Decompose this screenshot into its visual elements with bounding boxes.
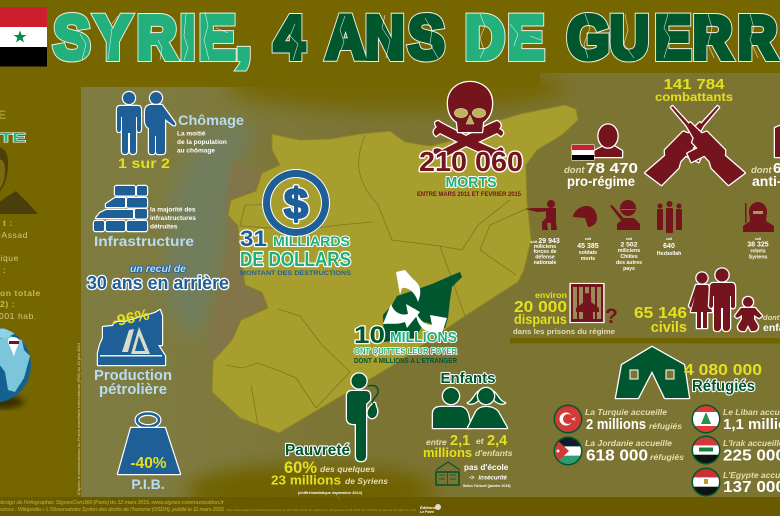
section: morts: MORTS: [446, 174, 496, 191]
icon: children: [433, 388, 507, 428]
section: pauvreté: [271, 374, 388, 495]
title word: DE: DE: [465, 4, 544, 72]
text: Turquie: réfugiés: [649, 422, 683, 431]
sidebar facts: :: [3, 265, 6, 275]
section: pauvreté: 23 millions: [271, 472, 341, 488]
icon: man with bag: [347, 374, 377, 461]
section: destructions: DE DOLLARS: [240, 249, 351, 271]
flag of Syria: [0, 7, 47, 66]
icon: dollar coin: [262, 169, 330, 237]
section: combattants: [645, 76, 745, 195]
section: combattants: combattants: [655, 90, 733, 104]
pro-régime group: 78 470: [586, 160, 638, 177]
section: recul: un recul de: [130, 263, 186, 275]
label: Production: [94, 367, 172, 384]
label: rebelles: Syriens: [749, 254, 767, 260]
text: Irak: 225 000: [723, 448, 780, 464]
label: chiites: [616, 237, 642, 272]
icon: soldier: [594, 124, 622, 157]
label: rebelles: [747, 237, 769, 260]
section: réfugiés: Réfugiés: [692, 378, 755, 395]
section: déplacés: MILLIONS: [390, 329, 457, 346]
icon: rebel (cropped): [775, 125, 780, 157]
sidebar facts: on totale: [0, 288, 41, 298]
label: hezbollah: [657, 237, 681, 257]
sidebar facts: 001 hab.: [0, 311, 37, 321]
panel: main content background: [81, 66, 780, 516]
label: chiites: soit: [626, 237, 633, 241]
icon: globe pin: [8, 337, 19, 357]
text: Irak: [723, 438, 780, 464]
icon: weight: [118, 414, 180, 474]
title word: SYRIE,: SYRIE,: [53, 4, 251, 72]
icon: masked rebel: [743, 202, 774, 232]
globe: [0, 327, 31, 409]
icon: two men: [117, 92, 175, 154]
flag: Jordanie: [554, 436, 582, 466]
caption: ENTRE MARS 2011 ET FEVRIER 2015: [417, 191, 521, 198]
description: [150, 206, 196, 230]
flag: Turquie: [554, 404, 582, 434]
text: Turquie: 2 millions: [586, 416, 646, 433]
label: chiites: miliciens: [618, 248, 640, 254]
figure: et: [476, 436, 485, 446]
figure: [423, 433, 513, 460]
label: rebelles: soit: [755, 237, 762, 241]
flag: Liban: [692, 404, 720, 434]
figure: 2,1: [450, 433, 470, 449]
figure: children: dont: [763, 313, 780, 322]
heading: Chômage: [178, 112, 244, 128]
title word: 4 ANS: 4 ANS: [274, 4, 445, 72]
label: hezbollah: 640: [663, 243, 675, 250]
label: P.I.B.: [131, 476, 165, 492]
map of Syria: [212, 105, 578, 500]
section: civils: civils: [651, 320, 687, 336]
label: forces de défense: miliciens: [534, 244, 556, 250]
logo: Le Point: [420, 510, 435, 514]
label: forces de défense: défense: [535, 254, 555, 260]
pro-régime group: pro-régime: [567, 173, 635, 189]
figure: 4 080 000: [684, 362, 762, 379]
icon: kneeling soldier: [525, 200, 557, 230]
label: forces de défense: nationale: [534, 260, 556, 266]
figure: 1 sur 2: [118, 155, 170, 171]
label: chiites: 2 502: [620, 242, 638, 248]
section: déplacés: ONT QUITTES LEUR FOYER: [354, 347, 457, 356]
label: hezbollah: Hezbollah: [657, 251, 681, 257]
vertical source note: D'après le mémorandum du Fonds monétaire international (FMI) du 10 juin 2014: [77, 343, 81, 495]
section: recul: [87, 263, 229, 293]
flag: Egypte: [692, 468, 720, 496]
description: la majorité des: [150, 206, 196, 214]
figure: environ: [535, 290, 567, 300]
footer credits: [0, 499, 416, 513]
heading: Enfants: [440, 370, 496, 387]
figure: millions: [423, 445, 472, 460]
figure: dont: [751, 165, 772, 176]
title: [53, 4, 780, 72]
section: recul: 30 ans en arrière: [87, 273, 229, 293]
figure: d'enfants: [475, 448, 513, 458]
icon: bag string: [368, 385, 378, 403]
section: destructions: [240, 169, 351, 277]
logo: Éditions: [420, 505, 437, 510]
section: réfugiés: [616, 347, 762, 398]
footer credits: © design de l'infographie: SignesCom360 (Paris) du 12 mars 2015. www.signes-communication.fr: [0, 499, 225, 506]
heading: Infrastructure: [94, 233, 194, 249]
text: Jordanie: [585, 438, 685, 464]
section: destructions: MILLIARDS: [273, 233, 350, 249]
icon: baby: [735, 297, 762, 331]
icon: broken wall: [94, 186, 147, 231]
description: La moitié: [177, 130, 206, 138]
label: forces de défense: [530, 238, 560, 266]
icon: prison cage: [570, 284, 604, 322]
section: morts: [417, 82, 523, 198]
footer band: [0, 497, 780, 516]
label: soldats: 45 385: [577, 243, 599, 250]
figure: dont: [564, 165, 585, 176]
note: pas d'école: [464, 463, 509, 472]
section: enfants: Selon l'Unicef (janvier 2015): [463, 484, 511, 488]
logo: [420, 504, 441, 514]
label: forces de défense: forces de: [533, 249, 557, 255]
icon: family: [689, 268, 735, 331]
text: Jordanie: 618 000: [586, 448, 648, 464]
label: soldats: [577, 237, 599, 262]
section: pauvreté: des quelques: [320, 464, 375, 474]
section: PIB: [118, 414, 180, 492]
icon: map with arrows: [383, 270, 462, 342]
section: disparus: dans les prisons du régime: [513, 327, 615, 336]
label: rebelles: 38 325: [747, 242, 769, 248]
icon: question mark: ?: [605, 305, 618, 328]
label: chiites: Chiites: [620, 254, 638, 260]
section: déplacés: [354, 270, 462, 365]
text: Egypte: [723, 470, 780, 496]
icon: tent: [616, 347, 689, 398]
caption: MONTANT DES DESTRUCTIONS: [240, 270, 351, 277]
footer credits: http://www.lepoint.fr/monde/syrie-plus-de-210-000-morts-en-quatre-ans-de-guerre-11-03-2015 les chiffres de janvier de quoi ils sont: [226, 508, 416, 512]
section: disparus: disparus: [514, 311, 567, 327]
title word: SYRIE,: SYRIE,: [53, 4, 251, 72]
anti-régime group: [751, 125, 780, 189]
title word: DE: DE: [465, 4, 544, 72]
icon: helmet: [573, 206, 597, 227]
label: hezbollah: soit: [666, 237, 673, 241]
icon: dollar coin: $: [284, 180, 308, 229]
section: déplacés: DONT 4 MILLIONS A L'ETRANGER: [354, 358, 457, 365]
icon: skull and crossbones: [434, 82, 504, 158]
icon: small Syrian flag: [572, 144, 594, 160]
divider band: [510, 338, 780, 344]
icon: crossed rifles: [645, 100, 745, 195]
flag: Irak: [692, 436, 720, 464]
label: soldats: soldats: [579, 250, 597, 256]
heading: 141 784: [664, 76, 725, 93]
figure: entre: [426, 437, 447, 447]
pro-régime group: [564, 124, 638, 189]
fighter sub-categories: [525, 200, 774, 272]
text: Turquie: [585, 407, 683, 433]
label: rebelles: rebels: [750, 248, 766, 254]
description: au chômage: [177, 148, 215, 154]
figure: 2,4: [487, 433, 507, 449]
sidebar facts: 2) :: [0, 299, 15, 309]
description: infrastructures: [150, 215, 196, 222]
sidebar facts: [0, 218, 41, 321]
label: chiites: pays: [623, 266, 635, 272]
text: Jordanie: La Jordanie accueille: [585, 438, 672, 448]
sidebar: president of Syria (cropped): [0, 108, 41, 321]
source: (chiffre/statistique septembre 2014): [298, 491, 363, 495]
heading: Pauvreté: [285, 442, 350, 459]
icon: militiaman: [610, 200, 640, 230]
figure: 10: [354, 322, 385, 349]
section: pauvreté: de Syriens: [345, 476, 388, 486]
section: enfants: -> insécurité: [469, 476, 508, 482]
description: de la population: [177, 139, 227, 146]
icon: oil pump: [98, 310, 165, 365]
section: infrastructure: [94, 186, 196, 249]
sidebar facts: t :: [3, 218, 13, 228]
figure: 60%: [284, 458, 317, 477]
figure: -40%: [130, 455, 167, 472]
text: Jordanie: réfugiés: [650, 453, 685, 462]
section: production pétrolière: [94, 306, 172, 398]
figure: 31: [240, 226, 267, 251]
description: détruites: [150, 224, 178, 230]
text: Liban: [723, 407, 780, 433]
icon: book school: [436, 462, 460, 485]
figure: -96%: [110, 306, 151, 331]
section: production pétrolière: pétrolière: [99, 381, 167, 398]
text: Egypte: 137 000: [723, 479, 780, 496]
section: chômage: [117, 92, 244, 171]
section: enfants: [423, 370, 513, 488]
footer credits: Sources : Wikipédia « L'Observatoire Syrien des droits de l'homme (OSDH), publié le 11 mars 2015: [0, 507, 225, 513]
title word: 4 ANS: 4 ANS: [274, 4, 445, 72]
label: soldats: soit: [585, 237, 592, 241]
label: forces de défense: soit 29 943: [530, 238, 560, 245]
figure: 210 060: [419, 146, 523, 177]
section: disparus: 20 000: [514, 299, 567, 316]
section: civils: [634, 268, 780, 336]
icon: group of three: [657, 201, 682, 233]
portrait: [0, 147, 38, 214]
figure: 65 146: [634, 305, 687, 322]
title cracks: [80, 12, 758, 60]
icon: dollar coin: $: [284, 180, 308, 229]
text: Turquie: La Turquie accueille: [585, 407, 667, 417]
description: [177, 130, 227, 154]
label: soldats: morts: [581, 256, 595, 262]
section: disparus: [513, 284, 618, 336]
label: chiites: des autres: [616, 260, 642, 266]
